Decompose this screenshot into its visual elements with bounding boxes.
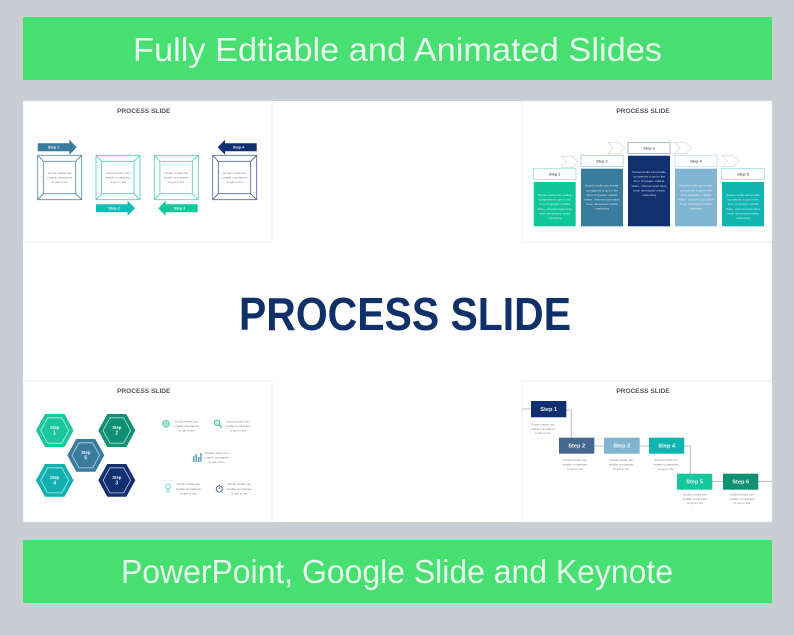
flow text 4: to get in the [658, 467, 674, 471]
frame text 4: to get in the [227, 180, 243, 184]
column 1: been developed media [539, 211, 571, 215]
frame text 1: enable companies [47, 175, 73, 179]
column 1: companies to get in the [539, 198, 571, 202]
column 1: share. Internet tools have [537, 207, 572, 211]
column 1: Social media can enable [538, 193, 572, 197]
frame text 3: Social media can [165, 171, 188, 175]
arrow: step 4: Step 4 [233, 146, 245, 150]
flow step 4: Step 4 [658, 444, 676, 450]
column 3: Social media can enable [632, 170, 666, 174]
flow step 6: Step 6 [732, 480, 749, 486]
bottom banner [23, 540, 772, 603]
column 5: companies to get in the [727, 198, 759, 202]
flow text 1: enable companies [530, 427, 556, 431]
flow text 2: to get in the [567, 467, 583, 471]
frame text 2: enable companies [105, 175, 131, 179]
frame 3 [154, 155, 198, 200]
flow step 6 [723, 474, 758, 490]
frame text 1: to get in the [52, 180, 68, 184]
panel heading: PROCESS SLIDE [117, 108, 171, 115]
column 5: Social media can enable [726, 193, 760, 197]
column 2: marketing [595, 207, 609, 211]
flow text 2: Social media can [563, 458, 587, 462]
flow text 3: to get in the [613, 467, 630, 471]
hexagon step 5: Step [81, 450, 90, 455]
hexagon step 2: Step [112, 425, 121, 430]
hexagon step 4: Step [50, 475, 59, 480]
flow text 3: Social media can [610, 458, 633, 462]
column 5: share. Internet tools have [726, 207, 761, 211]
hexagon step 2 [98, 414, 135, 447]
main title: PROCESS SLIDE [239, 288, 571, 340]
connector lines [522, 409, 772, 481]
top banner [23, 17, 772, 80]
column 4 [675, 155, 717, 226]
column 3: share. Internet tools have [632, 184, 667, 188]
frame 4 [213, 155, 257, 200]
column 1: marketing [548, 216, 562, 220]
hexagon step 1: Step [50, 425, 59, 430]
icon text: magnifier: enable companies [225, 424, 251, 428]
hexagon step 5 [67, 439, 104, 472]
flow step 2 [559, 438, 594, 454]
column 5: form of greater market [728, 202, 758, 206]
icon text: stopwatch: to get in the [231, 491, 248, 495]
column 3: form of greater market [634, 179, 664, 183]
flow step 4 [649, 438, 684, 454]
arrow: step 3 [158, 201, 198, 216]
arrow: step 1 [38, 140, 77, 155]
hexagon step 2: 2 [115, 430, 118, 436]
column 3: been developed media [633, 188, 665, 192]
column 2: Social media can enable [585, 184, 619, 188]
flow step 3 [604, 438, 640, 454]
icon: light bulb [166, 484, 170, 492]
arrow: step 4 [218, 140, 257, 155]
arrow: step 2 [96, 201, 135, 216]
flow text 1: Social media can [531, 422, 554, 426]
flow text 1: to get in the [535, 431, 551, 435]
column 4: share. Internet tools have [679, 198, 714, 202]
panel heading: PROCESS SLIDE [117, 388, 171, 395]
column 4: Social media can enable [679, 184, 713, 188]
icon text: light bulb: to get in the [180, 491, 197, 495]
column 1 [533, 169, 576, 226]
hexagon step 4: 4 [53, 480, 56, 486]
arrow: step 1: Step 1 [48, 146, 59, 150]
column 2: companies to get in the [586, 188, 618, 192]
frame text 3: enable companies [164, 175, 189, 179]
column 5: marketing [736, 216, 750, 220]
flow text 5: to get in the [687, 501, 703, 505]
bottom banner: PowerPoint, Google Slide and Keynote [121, 554, 673, 591]
column 5: been developed media [727, 211, 759, 215]
icon: stopwatch [216, 485, 222, 492]
icon text: target: enable companies [174, 424, 200, 428]
icon text: stopwatch: enable companies [227, 487, 252, 491]
column 3: companies to get in the [633, 175, 665, 179]
icon: bar chart [192, 453, 202, 462]
column 2: Step 2 [596, 159, 608, 163]
icon text: magnifier: to get in the [230, 429, 246, 433]
white content area [23, 101, 772, 522]
hexagon step 3: Step [112, 475, 121, 480]
panel heading: PROCESS SLIDE [616, 388, 670, 395]
hexagon step 4 [36, 464, 74, 497]
column 2 [581, 155, 623, 226]
flow text 6: Social media can [730, 492, 754, 496]
hexagon step 3 [98, 464, 135, 497]
panel: staircase flow process [522, 381, 772, 522]
flow text 5: Social media can [683, 492, 707, 496]
icon text: bar chart: to get in the [209, 460, 225, 464]
column 3: marketing [642, 193, 656, 197]
icon text: target: to get in the [179, 429, 195, 433]
frame text 3: to get in the [168, 180, 185, 184]
frame text 4: Social media can [223, 171, 246, 175]
frame text 1: Social media can [48, 171, 71, 175]
hexagon step 5: 5 [84, 455, 87, 461]
icon: magnifier [214, 420, 222, 428]
icon text: light bulb: enable companies [176, 487, 201, 491]
column 3: Step 3 [643, 146, 655, 150]
flow text 4: Social media can [654, 458, 678, 462]
icon text: target: Social media can [175, 419, 198, 423]
flow step 5 [677, 474, 712, 490]
column 1: Step 1 [549, 173, 560, 177]
hexagon step 1: 1 [53, 430, 56, 436]
column 2: share. Internet tools have [585, 198, 620, 202]
column 3 [628, 142, 670, 226]
frame text 2: to get in the [110, 180, 126, 184]
hexagon step 1 [36, 414, 74, 447]
flow step 3: Step 3 [613, 444, 630, 450]
flow text 3: enable companies [609, 462, 634, 466]
panel: framed squares process [23, 101, 272, 242]
column 1: form of greater market [539, 202, 570, 206]
frame text 2: Social media can [106, 171, 130, 175]
icon text: bar chart: Social media can [205, 451, 228, 455]
icon text: bar chart: enable companies [204, 455, 230, 459]
column 5 [722, 169, 764, 226]
flow step 1 [531, 401, 566, 417]
hexagon step 3: 3 [115, 480, 118, 486]
frame text 4: enable companies [222, 175, 248, 179]
flow text 6: to get in the [734, 501, 750, 505]
frame 1 [38, 155, 82, 200]
panel: hexagon process [23, 381, 272, 522]
panel: stepped columns process [522, 101, 772, 242]
column 4: form of greater market [681, 193, 711, 197]
flow step 1: Step 1 [540, 407, 557, 413]
flow text 5: enable companies [682, 497, 708, 501]
column 2: been developed media [586, 202, 618, 206]
flow text 6: enable companies [729, 497, 755, 501]
column 4: marketing [689, 207, 703, 211]
column 2: form of greater market [587, 193, 617, 197]
icon text: magnifier: Social media can [226, 419, 250, 423]
flow step 2: Step 2 [568, 444, 585, 450]
arrow: step 3: Step 3 [174, 207, 185, 211]
flow text 2: enable companies [562, 462, 588, 466]
flow step 5: Step 5 [686, 480, 703, 486]
panel heading: PROCESS SLIDE [616, 108, 670, 115]
column 4: Step 4 [690, 159, 703, 163]
icon: target [162, 420, 170, 428]
column 5: Step 5 [737, 173, 749, 177]
icon text: light bulb: Social media can [177, 482, 200, 486]
chevrons [561, 143, 739, 167]
icon text: stopwatch: Social media can [228, 482, 251, 486]
top banner: Fully Edtiable and Animated Slides [133, 32, 662, 69]
frame 2 [96, 155, 140, 200]
flow text 4: enable companies [653, 462, 679, 466]
arrow: step 2: Step 2 [108, 207, 120, 211]
column 4: been developed media [680, 202, 712, 206]
column 4: companies to get in the [680, 188, 712, 192]
